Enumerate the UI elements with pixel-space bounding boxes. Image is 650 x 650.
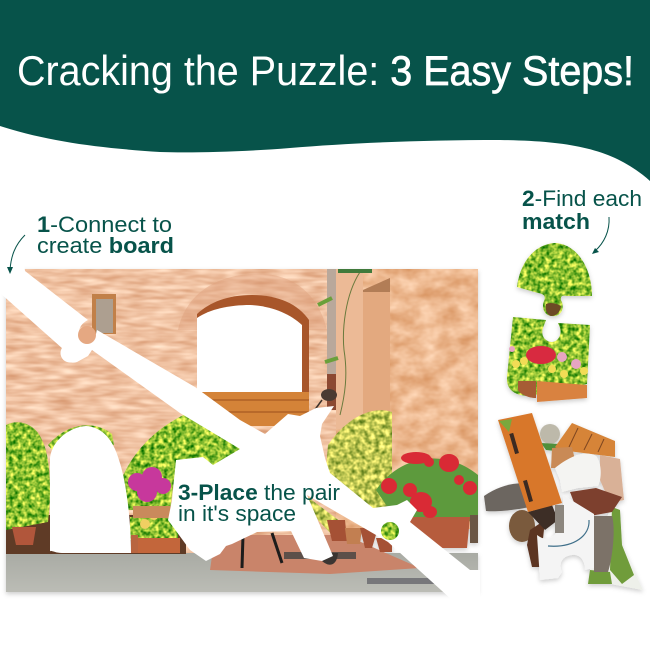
step 2 label: match [522, 209, 590, 234]
geranium blooms [381, 452, 477, 518]
white cutout: door shaped slot [50, 426, 131, 553]
white cutout: diagonal strip and scooter [0, 262, 480, 600]
scooter mirror [314, 389, 337, 409]
knob shade [546, 303, 561, 316]
photo puzzle knob: brick [78, 326, 96, 344]
step 1 label: create board [37, 233, 170, 258]
puzzle piece: scooter [484, 413, 643, 590]
step 3 label: in it's space [178, 501, 296, 526]
brick column [336, 269, 363, 429]
flower bed foliage [507, 317, 590, 396]
upper planter [133, 506, 171, 518]
door leaf patch [499, 419, 512, 432]
orange door panel [498, 413, 562, 512]
flower arch above door [48, 425, 114, 450]
doorway recess [363, 288, 390, 413]
puzzle piece: arch of foliage [517, 243, 592, 316]
arrow: step 2 [592, 217, 609, 254]
small wall niche [92, 294, 116, 334]
brown fender [527, 520, 545, 567]
grey panel [555, 505, 564, 533]
yellow blooms [140, 518, 158, 529]
doorway shade [363, 278, 390, 292]
planter at right [402, 517, 470, 548]
step 1 label: 1-Connect to [37, 212, 164, 237]
climbing vine [318, 271, 372, 415]
grey tube [594, 516, 614, 572]
left pot [12, 527, 36, 545]
white scooter body [537, 495, 594, 580]
right lime shrub [325, 410, 392, 515]
small planter [518, 381, 536, 398]
scooter wheel [322, 553, 338, 565]
header banner: green wave [0, 0, 650, 181]
geranium foliage [376, 459, 478, 525]
brick arch above window [178, 274, 327, 330]
step 3 label: 3-Place the pair [178, 480, 337, 505]
pink flowers [128, 467, 171, 502]
brick rim [551, 447, 575, 468]
foliage arch [517, 243, 592, 316]
wheel rim [509, 510, 535, 542]
helmet [540, 424, 560, 451]
green tail foliage [610, 507, 634, 584]
lower planter [138, 538, 180, 553]
left bush [6, 422, 50, 530]
tail white [590, 505, 643, 590]
window frame [197, 295, 309, 392]
scooter stand legs [242, 533, 282, 568]
terracotta floor [210, 535, 420, 574]
drain pipe [327, 269, 336, 410]
small door pot [131, 535, 138, 553]
dark base behind plants [6, 515, 186, 554]
photo puzzle knob: flowers [381, 522, 399, 540]
stone patch [600, 455, 624, 503]
red railing [570, 488, 622, 516]
ground [6, 553, 478, 593]
orange planter [537, 381, 587, 402]
plants under strip [308, 497, 338, 532]
yellow flowers [512, 357, 588, 378]
puzzle board photo [6, 269, 478, 593]
arrow: step 1 [7, 235, 25, 274]
pots under strip [327, 520, 392, 552]
white cutout: window shaped slot [197, 305, 302, 392]
middle shrub [123, 415, 240, 510]
white puzzle knob [60, 344, 80, 362]
wooden shutter [197, 392, 309, 426]
brick wall [6, 269, 336, 559]
bottom green bits [588, 570, 612, 584]
title: Cracking the Puzzle: 3 Easy Steps! [17, 47, 634, 94]
red flowers [526, 346, 556, 364]
door hinges [509, 433, 533, 502]
wood planks [569, 428, 604, 452]
stone wall [336, 269, 478, 529]
tyre [484, 483, 536, 511]
dark engine [528, 505, 558, 530]
floor mat [284, 552, 356, 559]
lower plant [130, 517, 178, 540]
puzzle piece: flower bed [507, 317, 590, 402]
blue fender curve [548, 520, 589, 546]
drain strip [367, 578, 439, 584]
right wall shade [470, 515, 478, 543]
upper right wood [555, 423, 615, 457]
step 2 label: 2-Find each [522, 186, 639, 211]
white body [555, 454, 601, 492]
pink flowers [509, 346, 581, 369]
